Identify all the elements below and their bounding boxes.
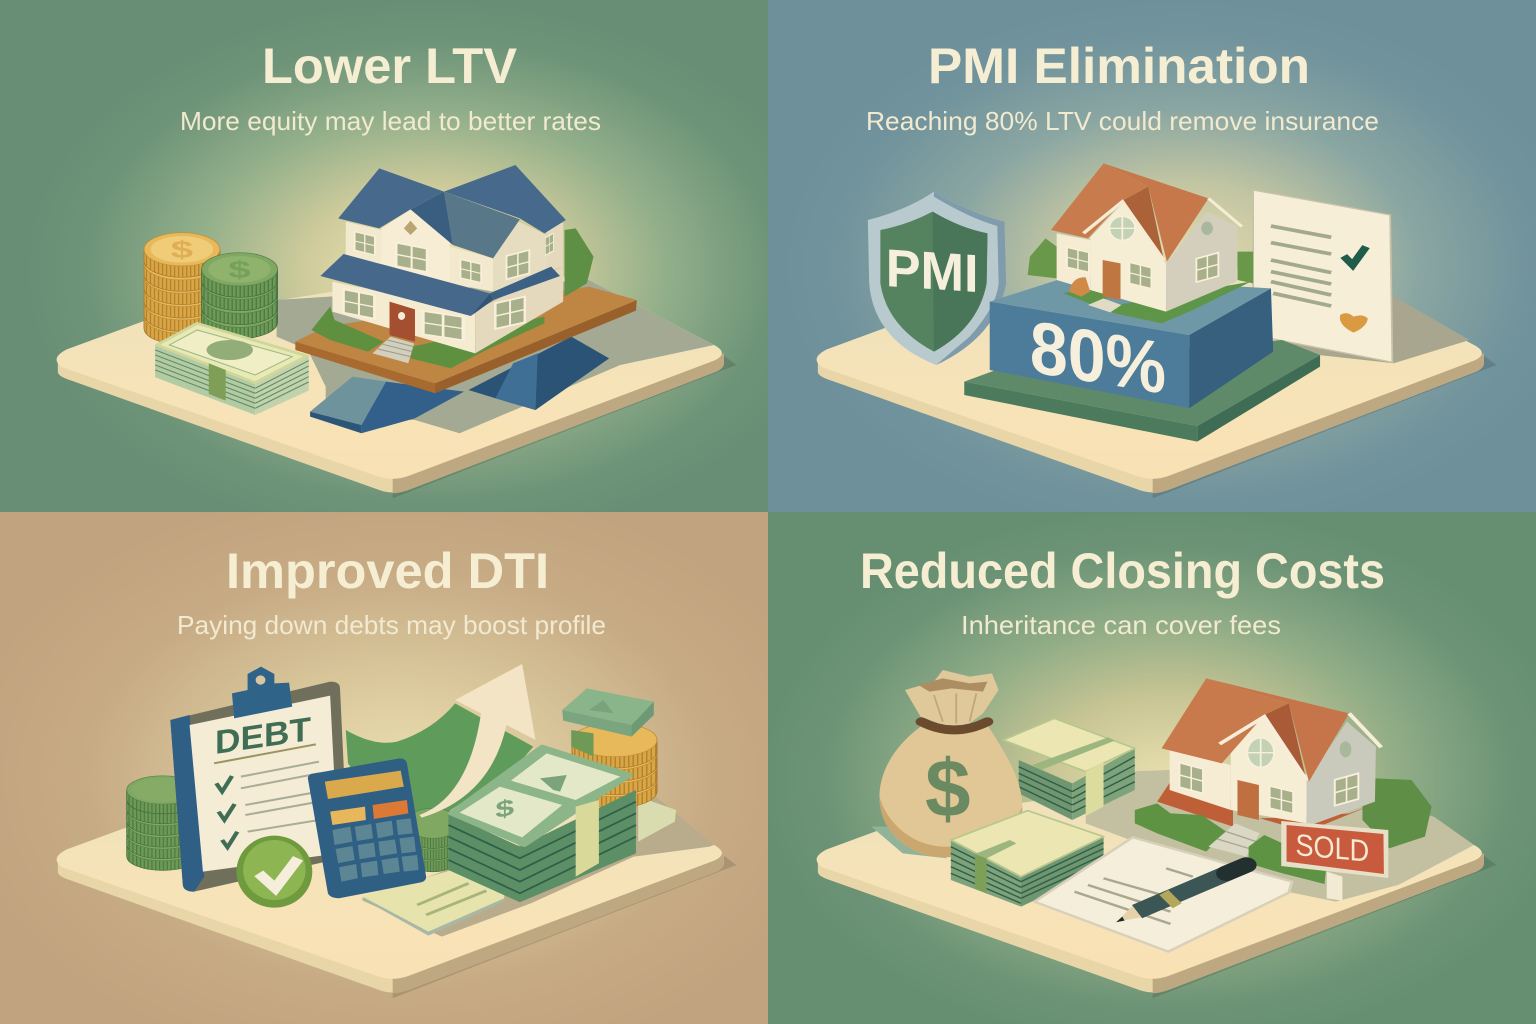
shield label: PMI	[886, 239, 979, 304]
subtitle: paying down debts: Paying down debts may boost profile	[177, 610, 606, 640]
icon: tree	[565, 228, 594, 297]
panel: PMI Elimination	[768, 0, 1536, 512]
icon: green coin stack	[202, 253, 277, 339]
icon: gold coin stack	[144, 233, 220, 345]
illustration: shield, 80% block, house and document	[817, 163, 1496, 498]
sign label: SOLD	[1296, 827, 1369, 868]
title: Improved DTI: Improved DTI	[226, 543, 549, 599]
icon: house	[1051, 163, 1251, 323]
illustration: money bag, bills, document and sold house	[817, 670, 1496, 998]
subtitle: reaching 80% LTV: Reaching 80% LTV could remove insurance	[866, 106, 1379, 136]
platform shadow	[1086, 767, 1474, 902]
icon: money stack: $	[495, 794, 515, 823]
subtitle: inheritance covers fees: Inheritance can cover fees	[961, 610, 1281, 640]
bag shadow	[871, 827, 947, 858]
panel: Lower LTV	[0, 0, 768, 512]
icon: green banner behind arrow	[346, 703, 533, 872]
clipboard heading: DEBT	[215, 711, 311, 762]
icon: 80% block	[990, 277, 1273, 410]
icon: bushes behind house	[1362, 778, 1432, 848]
icon: check badge	[236, 836, 312, 908]
icon: money bag	[879, 670, 1022, 857]
illustration: house on a seesaw with money	[57, 165, 736, 498]
icon: SOLD sign	[1281, 821, 1388, 901]
icon: upward arrow	[419, 664, 536, 818]
document shadow	[1273, 295, 1470, 363]
platform	[817, 267, 1496, 498]
icon: checklist document	[1253, 190, 1392, 362]
panel: Reduced Closing Costs	[768, 512, 1536, 1024]
platform	[57, 267, 736, 498]
icon: sold house	[1135, 678, 1381, 884]
icon: house	[311, 165, 566, 368]
icon: signed document	[1034, 837, 1292, 952]
platform shadow	[361, 797, 714, 937]
title: PMI Elimination: PMI Elimination	[928, 38, 1310, 94]
icon: stack of bills	[155, 323, 309, 415]
icon: front stack of bills	[951, 811, 1104, 907]
illustration: debt clipboard, calculator and falling-debt money	[57, 664, 736, 998]
platform	[817, 767, 1496, 998]
icon: DEBT clipboard	[170, 667, 348, 892]
icon: left coin stack	[127, 776, 199, 870]
icon: gold coin stack: $	[171, 236, 193, 263]
icon: bushes	[1028, 238, 1253, 283]
subtitle: more equity: More equity may lead to better rates	[180, 106, 601, 136]
panel: Improved DTI	[0, 512, 768, 1024]
block label: 80%	[1030, 305, 1166, 410]
icon: right coin stack with bills on top	[562, 688, 657, 808]
icon: seesaw base	[310, 337, 609, 433]
title: Reduced Closing Costs: Reduced Closing Costs	[860, 543, 1385, 599]
icon: paper bill under stack	[361, 797, 676, 936]
platform shadow	[277, 280, 714, 433]
icon: wooden board	[295, 287, 637, 393]
platform	[57, 767, 736, 998]
icon: money stack	[448, 747, 636, 902]
title: Lower LTV: Lower LTV	[262, 38, 518, 94]
icon: green base	[964, 340, 1320, 442]
icon: green coin stack: $	[228, 256, 251, 283]
dollar sign: $	[925, 744, 971, 834]
icon: PMI shield	[868, 192, 1006, 365]
icon: calculator	[308, 758, 426, 898]
icon: back stack of bills	[1003, 718, 1135, 820]
